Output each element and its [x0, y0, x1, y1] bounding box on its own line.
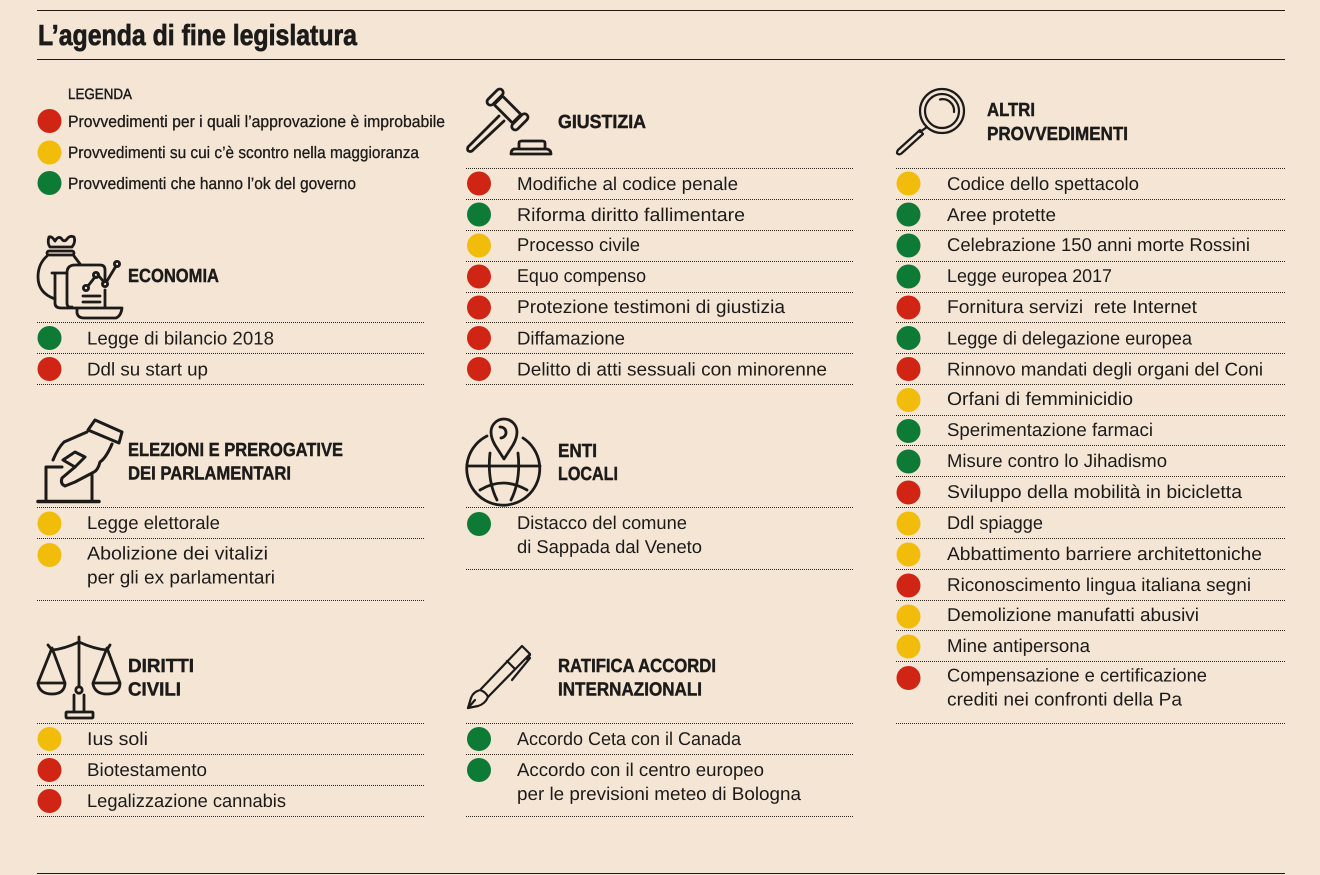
row: Modifiche al codice penale — [517, 173, 738, 194]
row: Compensazione e certificazione — [947, 664, 1207, 686]
row: Demolizione manufatti abusivi — [947, 604, 1199, 625]
row: Legge di delegazione europea — [947, 328, 1193, 348]
panel: diritti civili — [37, 637, 424, 816]
legend heading: LEGENDA — [68, 86, 132, 103]
row — [467, 326, 625, 350]
row — [38, 512, 220, 536]
row — [896, 664, 1207, 710]
row — [38, 542, 275, 588]
row — [896, 419, 1153, 443]
row: Diffamazione — [517, 328, 625, 348]
row: Riforma diritto fallimentare — [517, 204, 745, 225]
row — [38, 789, 286, 813]
icon: pen — [468, 646, 530, 708]
panel: economia — [37, 236, 424, 384]
row — [467, 202, 745, 226]
row: Ddl spiagge — [947, 512, 1043, 533]
row: crediti nei confronti della Pa — [947, 688, 1183, 710]
row: Rinnovo mandati degli organi del Coni — [947, 358, 1263, 380]
icon: magnifying glass — [897, 89, 964, 154]
row — [38, 758, 207, 782]
row — [896, 512, 1043, 536]
row — [896, 634, 1091, 658]
title: L’agenda di fine legislatura — [38, 20, 358, 52]
row — [467, 234, 640, 258]
legend item: red: Provvedimenti per i quali l’approvazione è improbabile — [68, 113, 445, 131]
row — [896, 264, 1112, 288]
legend item: green: Provvedimenti che hanno l’ok del governo — [68, 175, 356, 193]
row: Accordo Ceta con il Canada — [517, 728, 742, 749]
icon: hand and ballot box — [38, 420, 122, 502]
heading: DIRITTI — [128, 656, 194, 677]
heading: ELEZIONI E PREROGATIVE — [128, 440, 343, 461]
row: Sviluppo della mobilità in bicicletta — [947, 481, 1243, 502]
row: Aree protette — [947, 204, 1056, 225]
row: Distacco del comune — [517, 512, 687, 533]
heading: ALTRI — [987, 100, 1035, 121]
heading: GIUSTIZIA — [558, 112, 646, 133]
legend item: yellow — [38, 140, 420, 164]
panel: altri provvedimenti — [896, 89, 1285, 724]
row: Celebrazione 150 anni morte Rossini — [947, 234, 1250, 255]
row: Legalizzazione cannabis — [87, 790, 286, 811]
row: Legge europea 2017 — [947, 265, 1112, 286]
row: Protezione testimoni di giustizia — [517, 296, 786, 317]
icon: gavel — [468, 88, 551, 154]
row — [467, 512, 702, 557]
legend item: yellow: Provvedimenti su cui c’è scontro nella maggioranza — [68, 144, 420, 162]
row — [896, 172, 1139, 196]
row: Abolizione dei vitalizi — [87, 542, 268, 564]
icon: globe with pin — [467, 419, 540, 505]
row — [467, 264, 646, 288]
row: Codice dello spettacolo — [947, 173, 1139, 194]
row: Delitto di atti sessuali con minorenne — [517, 358, 827, 380]
row: Ius soli — [87, 728, 148, 749]
icon: scales — [38, 637, 120, 718]
row: Fornitura servizi rete Internet — [947, 296, 1197, 317]
legend item: green — [38, 171, 356, 195]
row: per gli ex parlamentari — [87, 566, 275, 588]
panel: giustizia — [466, 88, 854, 385]
icon: money bag and chart — [38, 236, 122, 318]
row — [467, 758, 802, 804]
row: Orfani di femminicidio — [947, 388, 1133, 409]
row: Biotestamento — [87, 759, 207, 780]
heading line 2: INTERNAZIONALI — [558, 680, 702, 700]
row: Legge di bilancio 2018 — [87, 328, 274, 348]
row: Equo compenso — [517, 265, 646, 286]
heading line 2: LOCALI — [558, 464, 618, 485]
legend item: red — [38, 109, 445, 133]
row: Misure contro lo Jihadismo — [947, 450, 1167, 471]
row: Processo civile — [517, 234, 640, 255]
panel: elezioni — [37, 420, 424, 600]
legend — [38, 86, 445, 195]
heading: ECONOMIA — [128, 266, 219, 287]
heading line 2: CIVILI — [128, 680, 181, 700]
heading line 2: DEI PARLAMENTARI — [128, 464, 291, 484]
row: di Sappada dal Veneto — [517, 536, 702, 557]
row: Sperimentazione farmaci — [947, 419, 1153, 440]
row: Riconoscimento lingua italiana segni — [947, 574, 1251, 595]
row: Abbattimento barriere architettoniche — [947, 543, 1262, 564]
row — [38, 727, 148, 751]
heading: RATIFICA ACCORDI — [558, 656, 716, 677]
row — [896, 604, 1199, 628]
row — [38, 326, 274, 350]
row: Accordo con il centro europeo — [517, 759, 764, 780]
row: Ddl su start up — [87, 358, 208, 380]
panel: ratifica — [466, 646, 854, 816]
panel: enti locali — [466, 419, 854, 570]
row — [38, 357, 208, 381]
heading line 2: PROVVEDIMENTI — [987, 124, 1128, 145]
heading: ENTI — [558, 441, 597, 462]
row: Legge elettorale — [87, 512, 220, 533]
row — [896, 388, 1133, 412]
row: Mine antipersona — [947, 635, 1091, 656]
row: per le previsioni meteo di Bologna — [517, 783, 802, 804]
row — [896, 202, 1056, 226]
